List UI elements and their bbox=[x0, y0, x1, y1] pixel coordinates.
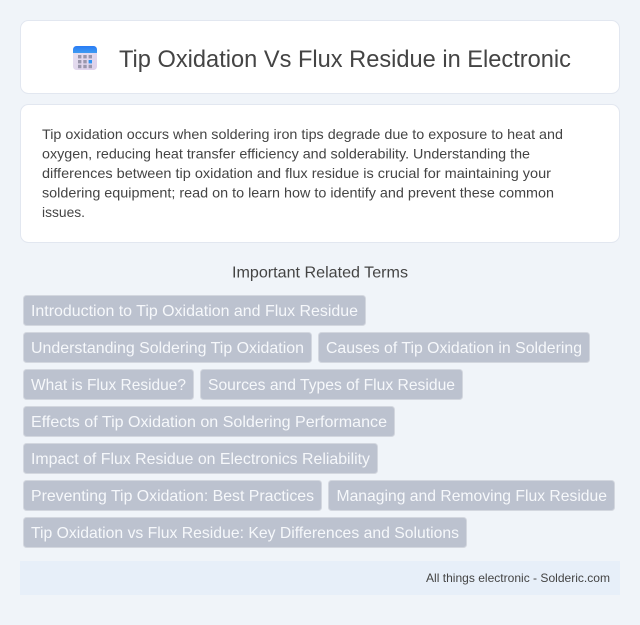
tag: managing bbox=[328, 480, 614, 510]
tag list: related terms bbox=[24, 296, 614, 548]
tag: key differences: Tip Oxidation vs Flux Residue: Key Differences and Solutions bbox=[31, 525, 459, 542]
tag: causes bbox=[318, 332, 590, 362]
text block: introduction paragraph: differences between tip oxidation and flux residue is crucial for maintaining your bbox=[42, 165, 551, 181]
tag: impact: Impact of Flux Residue on Electronics Reliability bbox=[31, 451, 370, 468]
tag: introduction: Introduction to Tip Oxidation and Flux Residue bbox=[31, 303, 358, 320]
text block: introduction paragraph: soldering equipment; read on to learn how to identify and prevent these common bbox=[42, 184, 554, 200]
footer bbox=[20, 561, 620, 595]
tag: understanding oxidation bbox=[24, 332, 312, 362]
heading: related terms: Important Related Terms bbox=[232, 264, 408, 282]
tag: preventing bbox=[24, 480, 322, 510]
tag: key differences bbox=[24, 518, 466, 548]
tag: what is flux residue: What is Flux Residue? bbox=[31, 377, 186, 394]
tag: impact bbox=[24, 444, 378, 474]
text block: introduction paragraph bbox=[42, 126, 563, 220]
footer credit: All things electronic - Solderic.com bbox=[426, 571, 610, 585]
text block: introduction paragraph: issues. bbox=[42, 204, 85, 220]
tag: effects: Effects of Tip Oxidation on Soldering Performance bbox=[31, 414, 387, 431]
tag: sources and types: Sources and Types of Flux Residue bbox=[208, 377, 455, 394]
tag: introduction bbox=[24, 296, 366, 326]
panel: header bbox=[20, 20, 620, 94]
panel: introduction bbox=[20, 104, 620, 242]
title: Tip Oxidation Vs Flux Residue in Electronic bbox=[119, 46, 571, 73]
tag: causes: Causes of Tip Oxidation in Soldering bbox=[326, 340, 582, 357]
icon: calendar bbox=[73, 46, 97, 70]
tag: preventing: Preventing Tip Oxidation: Best Practices bbox=[31, 488, 314, 505]
tag: sources and types bbox=[200, 370, 462, 400]
tag: managing: Managing and Removing Flux Residue bbox=[336, 488, 607, 505]
tag: effects bbox=[24, 406, 394, 436]
text block: introduction paragraph: oxygen, reducing heat transfer efficiency and solderability. Understanding the bbox=[42, 146, 530, 162]
tag: understanding oxidation: Understanding Soldering Tip Oxidation bbox=[31, 340, 304, 357]
text block: introduction paragraph: Tip oxidation occurs when soldering iron tips degrade due to exposure to heat and bbox=[42, 126, 563, 142]
tag: what is flux residue bbox=[24, 370, 194, 400]
